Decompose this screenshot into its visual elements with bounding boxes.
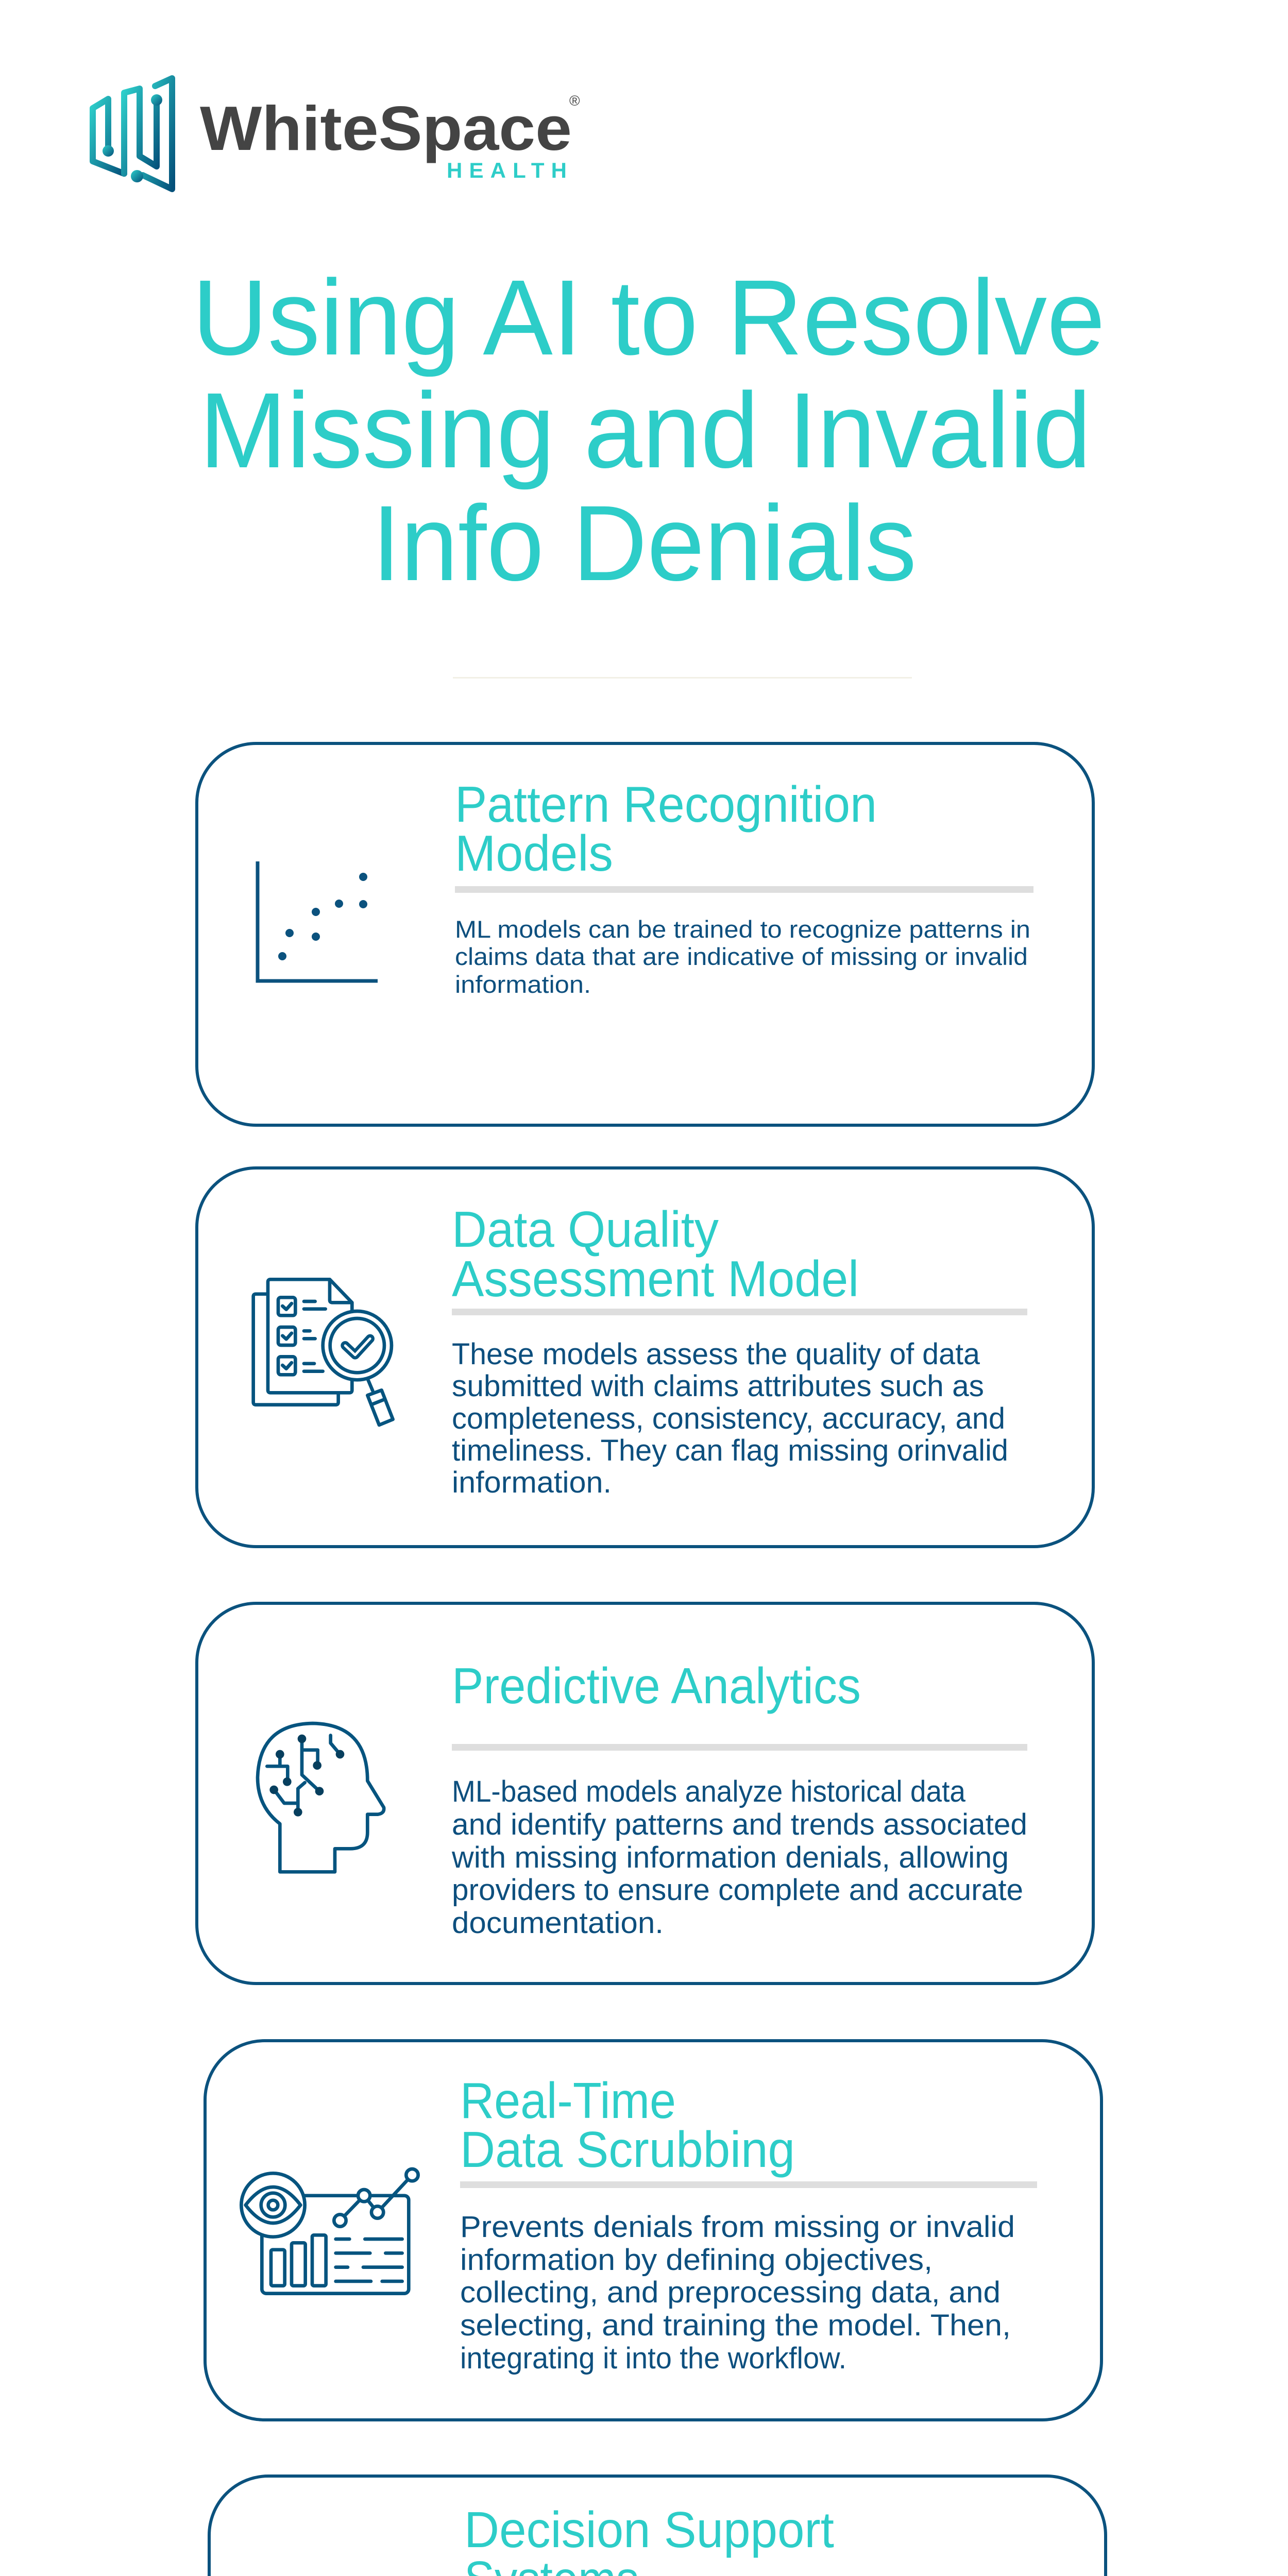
text block: selecting, and training the model. Then,	[460, 2309, 1011, 2342]
text block: information.	[452, 1466, 612, 1499]
text block: These models assess the quality of data	[452, 1337, 980, 1371]
panel: decision support systems	[209, 2476, 1106, 2576]
heading: Pattern Recognition	[455, 776, 877, 833]
text block: and identify patterns and trends associated	[452, 1808, 1027, 1841]
text block	[452, 1337, 1008, 1499]
text block: documentation.	[452, 1906, 664, 1940]
heading: Real-Time	[460, 2072, 676, 2129]
title: Using AI to Resolve	[192, 258, 1105, 378]
panel: real-time data scrubbing	[205, 2041, 1101, 2420]
title: Missing and Invalid	[199, 371, 1091, 490]
text block	[451, 1775, 1027, 1940]
panel: data quality assessment model	[197, 1168, 1093, 1547]
icon: dashboard with eye	[241, 2169, 418, 2294]
panel: pattern recognition models	[197, 743, 1093, 1125]
text block: providers to ensure complete and accurate	[452, 1873, 1023, 1907]
logo: HEALTH	[447, 158, 567, 182]
text block	[460, 2210, 1015, 2375]
heading	[460, 2072, 795, 2178]
icon: scatter plot	[258, 861, 378, 981]
heading: Decision Support	[464, 2501, 834, 2558]
text block: submitted with claims attributes such as	[452, 1369, 984, 1403]
heading: Assessment Model	[452, 1250, 859, 1307]
logo: ®	[569, 93, 580, 109]
text block: with missing information denials, allowing	[451, 1841, 1009, 1874]
heading: Data Scrubbing	[460, 2121, 795, 2178]
text block: completeness, consistency, accuracy, and	[452, 1402, 1005, 1435]
text block: collecting, and preprocessing data, and	[460, 2276, 1001, 2309]
heading	[455, 776, 877, 882]
icon: checklist with magnifier	[253, 1279, 393, 1425]
text block	[455, 916, 1030, 998]
text block: integrating it into the workflow.	[460, 2342, 846, 2375]
text block: timeliness. They can flag missing orinvalid	[452, 1434, 1008, 1467]
text block: Prevents denials from missing or invalid	[460, 2210, 1015, 2244]
title: Info Denials	[372, 484, 917, 603]
heading: Models	[455, 825, 613, 882]
heading: Predictive Analytics	[452, 1657, 861, 1714]
icon: head with circuits	[258, 1723, 384, 1872]
text block: claims data that are indicative of missing or invalid	[455, 943, 1028, 970]
text block: ML models can be trained to recognize patterns in	[455, 916, 1030, 943]
text block: ML-based models analyze historical data	[452, 1775, 966, 1808]
heading: Data Quality	[452, 1201, 719, 1258]
panel: predictive analytics	[197, 1603, 1093, 1984]
title	[192, 258, 1105, 603]
text block: information.	[455, 971, 591, 998]
icon: logo mark	[93, 78, 172, 189]
logo	[93, 78, 580, 189]
logo wordmark: WhiteSpace	[200, 93, 572, 163]
heading	[452, 1201, 859, 1307]
text block: information by defining objectives,	[460, 2243, 933, 2277]
